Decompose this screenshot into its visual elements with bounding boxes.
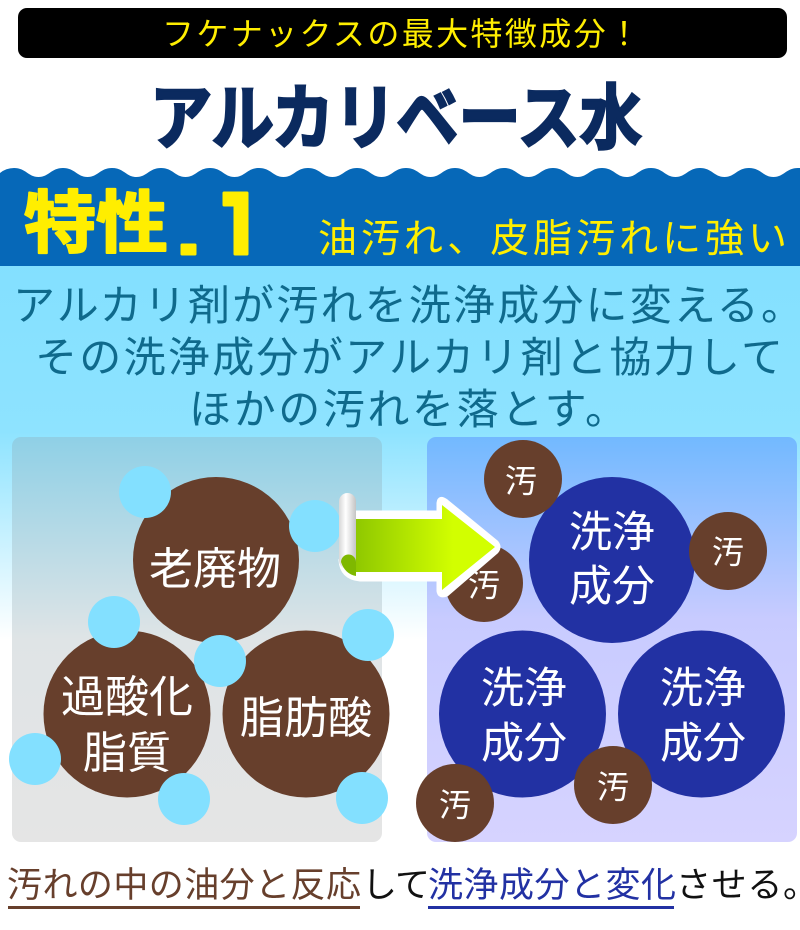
panel: before [9, 437, 394, 842]
dirt circles: 汚 [712, 534, 744, 570]
body text: アルカリ剤が汚れを洗浄成分に変える。 [13, 282, 800, 329]
circle: fatty acid: 脂肪酸 [240, 694, 372, 743]
circle: cleansing component top: 洗浄 [569, 509, 655, 557]
circle: cleansing component left [439, 630, 606, 798]
heading: feature 1 [24, 186, 247, 262]
dirt circles: 汚 [597, 769, 629, 805]
circle: fatty acid [222, 630, 390, 798]
circle: waste [133, 477, 299, 643]
circle: cleansing component right: 成分 [660, 720, 746, 768]
bottom caption [7, 866, 800, 909]
caption: brown phrase: 汚れの中の油分と反応 [7, 866, 361, 905]
panel: after [416, 437, 797, 842]
dirt circles: 汚 [439, 787, 471, 823]
subheading: 油汚れ、皮脂汚れに強い [318, 218, 787, 261]
body text: その洗浄成分がアルカリ剤と協力して [35, 334, 783, 381]
circle: cleansing component left: 洗浄 [481, 665, 567, 713]
top banner [18, 8, 787, 58]
circle: peroxidized lipid: 過酸化 [61, 673, 193, 722]
circle: peroxidized lipid [44, 630, 210, 798]
light blue background [0, 266, 800, 930]
dirt circles: 汚 [505, 463, 537, 499]
oil droplets [9, 466, 394, 825]
top banner: フケナックスの最大特徴成分！ [162, 16, 640, 52]
bottom caption: して [362, 866, 430, 905]
circle: cleansing component right [618, 630, 785, 798]
title: アルカリベース水 [150, 80, 642, 159]
circle: cleansing component left: 成分 [481, 720, 567, 768]
caption: blue phrase: 洗浄成分と変化 [428, 866, 676, 905]
wavy header band [0, 168, 800, 266]
heading: feature 1: 特性 [24, 186, 168, 262]
circle: waste: 老廃物 [149, 545, 281, 594]
circle: peroxidized lipid: 脂質 [83, 729, 171, 778]
body text: ほかの汚れを落とす。 [189, 386, 627, 433]
circle: cleansing component right: 洗浄 [660, 665, 746, 713]
circle: cleansing component top: 成分 [569, 563, 655, 611]
dirt circles: 汚 [468, 567, 500, 603]
body text [13, 282, 800, 433]
circle: cleansing component top [529, 477, 695, 643]
dirt circles [416, 440, 767, 842]
arrow [339, 493, 499, 596]
